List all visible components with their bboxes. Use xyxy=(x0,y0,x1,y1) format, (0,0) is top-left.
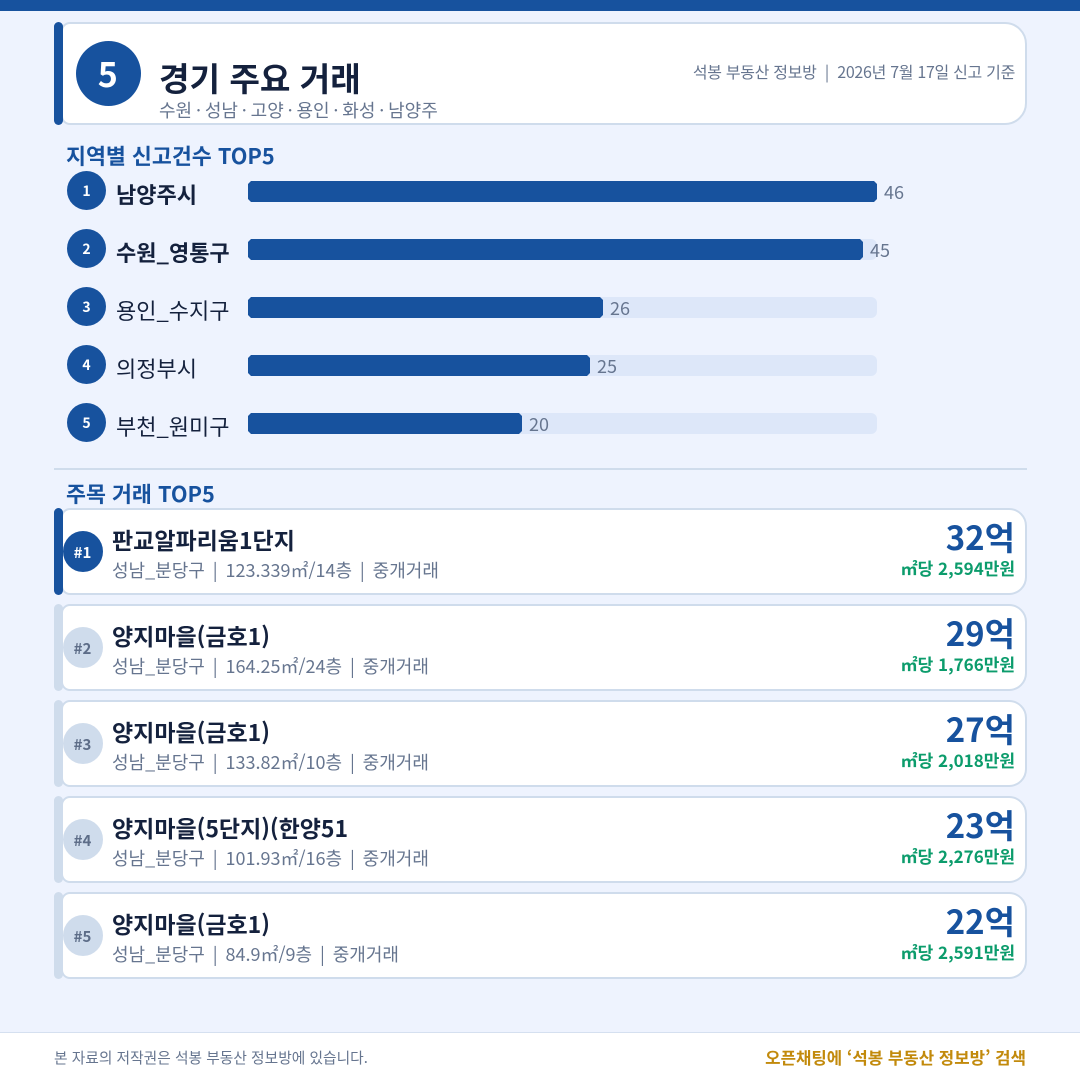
bar 1 xyxy=(248,181,877,202)
price: 27억 xyxy=(946,704,1015,752)
deal name: 양지마을(금호1) xyxy=(112,618,270,652)
label 1: 남양주시 xyxy=(116,178,197,210)
price: 22억 xyxy=(946,896,1015,944)
issue number badge xyxy=(76,41,141,106)
rank badge: #3 xyxy=(74,734,91,755)
label 3: 용인_수지구 xyxy=(116,294,230,326)
issue number badge: 5 xyxy=(98,48,118,97)
deal details: 성남_분당구 | 123.339㎡/14층 | 중개거래 xyxy=(112,557,439,583)
rank badge: #1 xyxy=(74,542,91,563)
panel: header xyxy=(54,22,1027,125)
label 5: 부천_원미구 xyxy=(116,410,230,442)
value 4: 25 xyxy=(597,353,617,379)
heading: regional ranking: 지역별 신고건수 TOP5 xyxy=(66,140,275,171)
deal details: 성남_분당구 | 101.93㎡/16층 | 중개거래 xyxy=(112,845,429,871)
deal details: 성남_분당구 | 84.9㎡/9층 | 중개거래 xyxy=(112,941,399,967)
rank badge xyxy=(62,627,102,668)
price per area: ㎡당 2,276만원 xyxy=(901,843,1015,868)
header accent bar xyxy=(54,22,63,125)
open chat call to action: 오픈채팅에 ‘석봉 부동산 정보방’ 검색 xyxy=(765,1045,1026,1069)
footer xyxy=(0,1032,1080,1080)
rank 4 xyxy=(67,345,106,384)
deal name: 양지마을(금호1) xyxy=(112,906,270,940)
panel: deal 1 xyxy=(54,508,1027,595)
heading: notable deals: 주목 거래 TOP5 xyxy=(66,478,215,509)
rank 4: 4 xyxy=(82,355,91,375)
deal details: 성남_분당구 | 164.25㎡/24층 | 중개거래 xyxy=(112,653,429,679)
panel: deal 5 xyxy=(54,892,1027,979)
bar 5 xyxy=(248,413,877,434)
deal name: 판교알파리움1단지 xyxy=(112,522,295,556)
value 1: 46 xyxy=(884,179,904,205)
panel: deal 3 xyxy=(54,700,1027,787)
panel: bar chart xyxy=(67,171,904,442)
title: 경기 주요 거래 xyxy=(159,52,361,101)
subtitle: 수원 · 성남 · 고양 · 용인 · 화성 · 남양주 xyxy=(159,97,438,123)
rank 1: 1 xyxy=(82,181,91,201)
bar 2 xyxy=(248,239,877,260)
source and date: 석봉 부동산 정보방 | 2026년 7월 17일 신고 기준 xyxy=(693,59,1015,83)
rank 3: 3 xyxy=(82,297,91,317)
rank 5: 5 xyxy=(82,413,91,433)
rank 1 xyxy=(67,171,106,210)
price per area: ㎡당 2,018만원 xyxy=(901,747,1015,772)
rank badge xyxy=(62,819,102,860)
rank badge: #2 xyxy=(74,638,91,659)
deal name: 양지마을(금호1) xyxy=(112,714,270,748)
panel: deal 4 xyxy=(54,796,1027,883)
rank badge xyxy=(62,531,102,572)
bar 3 xyxy=(248,297,877,318)
rank badge xyxy=(62,723,102,764)
rank 5 xyxy=(67,403,106,442)
price: 23억 xyxy=(946,800,1015,848)
rank 3 xyxy=(67,287,106,326)
copyright note: 본 자료의 저작권은 석봉 부동산 정보방에 있습니다. xyxy=(54,1047,368,1068)
panel: deal 2 xyxy=(54,604,1027,691)
price per area: ㎡당 2,591만원 xyxy=(901,939,1015,964)
value 2: 45 xyxy=(870,237,890,263)
label 4: 의정부시 xyxy=(116,352,197,384)
rank badge xyxy=(62,915,102,956)
label 2: 수원_영통구 xyxy=(116,236,230,268)
price: 32억 xyxy=(946,512,1015,560)
header card background xyxy=(61,22,1027,125)
rank badge: #5 xyxy=(74,926,91,947)
value 5: 20 xyxy=(529,411,549,437)
deal details: 성남_분당구 | 133.82㎡/10층 | 중개거래 xyxy=(112,749,429,775)
rank 2: 2 xyxy=(82,239,91,259)
price per area: ㎡당 1,766만원 xyxy=(901,651,1015,676)
price per area: ㎡당 2,594만원 xyxy=(901,555,1015,580)
top bar xyxy=(0,0,1080,11)
bar 4 xyxy=(248,355,877,376)
value 3: 26 xyxy=(610,295,630,321)
rank 2 xyxy=(67,229,106,268)
rank badge: #4 xyxy=(74,830,91,851)
deal name: 양지마을(5단지)(한양51 xyxy=(112,810,348,844)
price: 29억 xyxy=(946,608,1015,656)
